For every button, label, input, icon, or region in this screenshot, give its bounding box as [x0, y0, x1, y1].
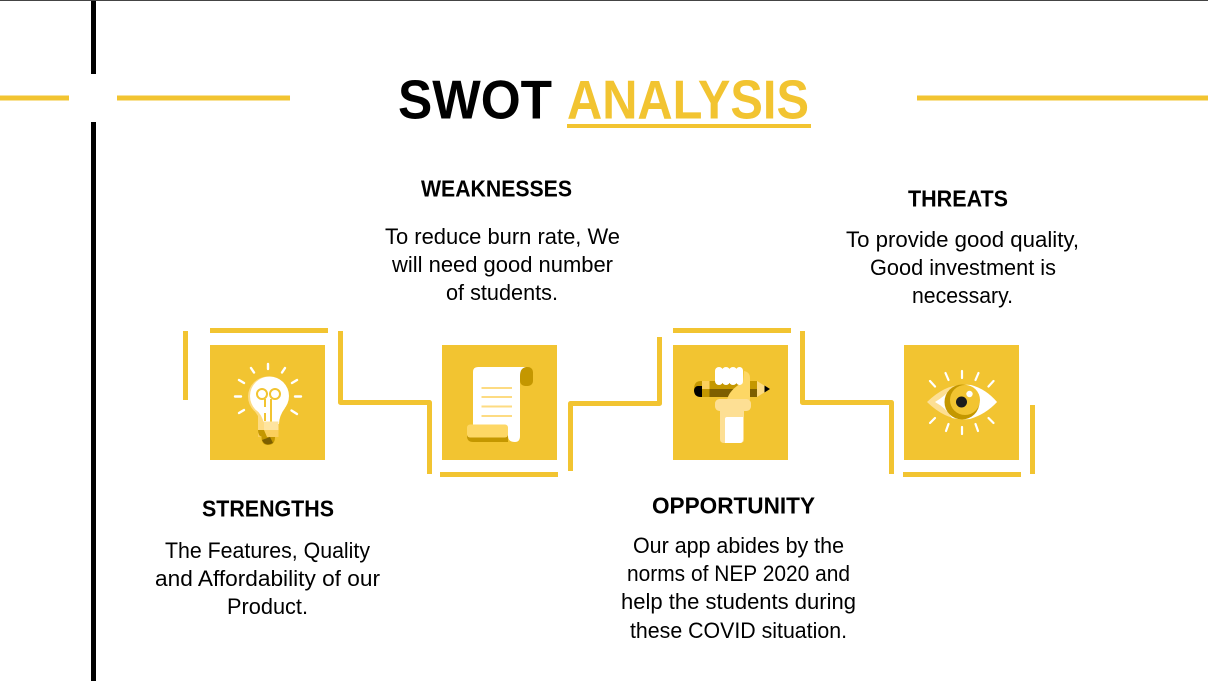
text block: threats: To provide good quality, — [846, 227, 1079, 252]
text block: threats — [846, 186, 1079, 308]
iris — [944, 384, 980, 420]
text block: threats: necessary. — [912, 283, 1013, 308]
text block: threats: THREATS — [908, 186, 1008, 212]
text block: threats: Good investment is — [870, 255, 1056, 280]
text block: opportunity: OPPORTUNITY — [652, 492, 815, 518]
text block: strengths: The Features, Quality — [165, 538, 370, 563]
icon tile: strengths light bulb — [210, 345, 325, 460]
title — [398, 68, 811, 130]
hand — [727, 371, 750, 400]
text block: opportunity: norms of NEP 2020 and — [627, 561, 850, 586]
bulb rays — [235, 364, 301, 414]
cuff and sleeve — [715, 399, 751, 411]
title: ANALYSIS — [567, 68, 809, 130]
icon tile: opportunity hand with pencil — [673, 345, 788, 460]
icon tile: weaknesses scroll — [442, 345, 557, 460]
pupil — [956, 396, 967, 408]
text block: opportunity: these COVID situation. — [630, 618, 847, 643]
text block: weaknesses: will need good number — [391, 252, 613, 277]
scroll text lines — [482, 388, 512, 416]
left vertical black rule — [91, 1, 96, 681]
text block: weaknesses: To reduce burn rate, We — [385, 224, 620, 249]
text block: strengths: Product. — [227, 594, 308, 619]
scroll page — [473, 367, 526, 442]
scroll curl — [520, 367, 533, 386]
text block: weaknesses: WEAKNESSES — [421, 176, 572, 202]
text block: opportunity: Our app abides by the — [633, 533, 844, 558]
bulb glass — [248, 376, 288, 416]
text block: strengths: STRENGTHS — [202, 496, 334, 522]
eye highlight — [966, 391, 973, 397]
text block: weaknesses: of students. — [446, 280, 558, 305]
icon tile: threats eye — [904, 345, 1019, 460]
text block: opportunity: help the students during — [621, 589, 856, 614]
fingers — [715, 367, 743, 385]
text block: weaknesses — [385, 176, 620, 305]
text block: strengths — [155, 496, 380, 619]
scroll bottom roll — [467, 430, 508, 442]
text block: opportunity — [621, 492, 856, 643]
text block: strengths: and Affordability of our — [155, 566, 380, 591]
eye white — [927, 385, 997, 419]
pencil — [694, 381, 702, 397]
bulb filament — [257, 389, 280, 422]
bulb base — [258, 422, 264, 430]
title: SWOT — [398, 68, 552, 130]
eye rays — [930, 371, 994, 434]
connector lines and accent bars — [186, 330, 1032, 474]
title rule lines — [0, 96, 1208, 100]
